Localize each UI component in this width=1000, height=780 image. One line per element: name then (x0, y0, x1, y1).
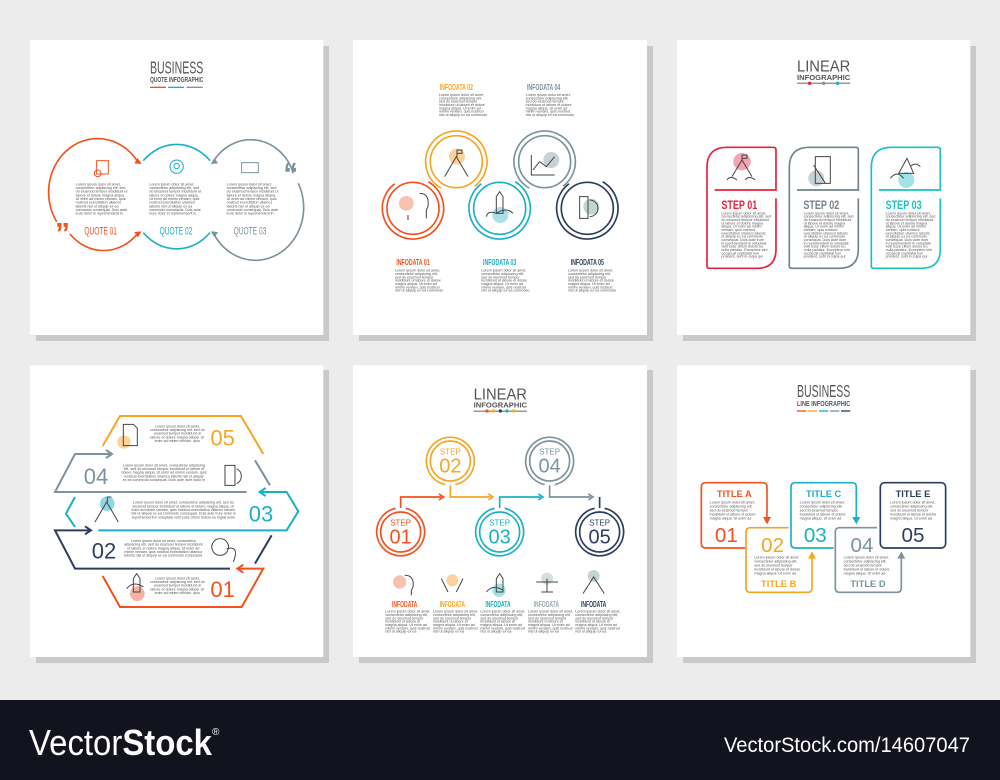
quote texts (76, 182, 278, 216)
step texts: velit esse cillum dolore eu (804, 245, 846, 249)
icons (94, 160, 258, 177)
quote marks: ” (55, 217, 70, 250)
infodata texts: Lorem ipsum dolor sit amet, (395, 269, 440, 273)
infodata texts: Lorem ipsum dolor sit amet, (575, 610, 620, 614)
circles (371, 120, 629, 250)
panel: linear steps 01-05 (353, 365, 647, 657)
title: QUOTE INFOGRAPHIC (150, 75, 204, 84)
step texts: velit esse cillum dolore eu (886, 245, 928, 249)
box texts: incididunt ut labore et dolore (800, 512, 846, 516)
step labels: STEP (589, 518, 610, 527)
step texts: ut labore et dolore magna (804, 221, 846, 225)
infodata texts: magna aliqua. Ut enim ad (395, 282, 437, 286)
step texts: ut labore et dolore magna (721, 221, 764, 225)
infodata texts: incididunt ut labore et dolore (526, 103, 572, 107)
band texts: ut labore et dolore magna aliqua. Ut enim ad (127, 546, 199, 550)
step texts: consectetur adipiscing elit, sed (804, 215, 853, 219)
box texts: incididunt ut labore et dolore (710, 512, 756, 516)
infodata texts: Lorem ipsum dolor sit amet, (385, 610, 430, 614)
box texts: incididunt ut labore et dolore (754, 568, 800, 572)
infodata texts: nisi ut aliquip ex ea commodo (568, 289, 616, 293)
box texts: incididunt ut labore et dolore (844, 568, 890, 572)
band texts: Lorem ipsum dolor sit amet, consectetur adipiscing elit, sed do (133, 501, 234, 505)
step texts: Lorem ipsum dolor sit amet, (721, 211, 766, 215)
step texts: consequat. Duis aute irure (804, 238, 846, 242)
box texts: Lorem ipsum dolor sit amet, (754, 556, 799, 560)
infodata texts: nisi ut aliquip ex ea (385, 630, 417, 634)
panel: linear infographic steps (677, 40, 970, 335)
infodata texts: sed do eiusmod tempor (568, 275, 607, 279)
icons (399, 149, 599, 223)
infodata labels: INFODATA (581, 600, 606, 609)
infodata texts: consectetur adipiscing elit, (385, 613, 428, 617)
title: BUSINESS (150, 57, 203, 77)
title (797, 59, 851, 85)
infodata texts: nisi ut aliquip ex ea commodo (439, 113, 487, 117)
quote labels: QUOTE 01 (84, 225, 117, 237)
box texts: consectetur adipiscing elit, (800, 504, 843, 508)
title (474, 386, 528, 413)
infodata texts: Lorem ipsum dolor sit amet, (439, 93, 484, 97)
step texts: ut aliquip ex ea commodo (804, 235, 845, 239)
infodata texts: Lorem ipsum dolor sit amet, (480, 610, 525, 614)
step texts: aliqua. Ut enim ad minim (804, 225, 844, 229)
infodata texts: consectetur adipiscing elit, (433, 613, 476, 617)
box texts: magna aliqua. Ut enim ad (800, 516, 841, 520)
infodata texts: minim veniam, quis nostrud (575, 626, 620, 630)
infodata texts: sed do eiusmod tempor (575, 616, 614, 620)
infodata texts: sed do eiusmod tempor (481, 275, 520, 279)
step texts: do eiusmod tempor incididunt (721, 218, 769, 222)
band texts: Lorem ipsum dolor sit amet, consectetur (131, 539, 196, 543)
infodata texts: consectetur adipiscing elit, (480, 613, 523, 617)
step texts: Lorem ipsum dolor sit amet, (804, 211, 849, 215)
quote texts: irure dolor in reprehenderit in (227, 212, 274, 216)
step texts: Lorem ipsum dolor sit amet, (886, 211, 931, 215)
arrowheads (85, 450, 266, 573)
panel: infodata circles (353, 40, 647, 335)
step texts: velit esse cillum dolore eu (721, 245, 763, 249)
infodata labels (392, 600, 606, 609)
band texts: dolore magna aliqua. Ut enim ad minim veniam, quis (121, 471, 207, 475)
infodata texts: Lorem ipsum dolor sit amet, (526, 93, 571, 97)
band texts: eiusmod tempor incididunt ut (154, 432, 201, 436)
infodata labels: INFODATA (534, 600, 559, 609)
infodata texts: sed do eiusmod tempor (439, 100, 478, 104)
band texts: eiusmod tempor incididunt ut (154, 584, 201, 588)
band texts: minim veniam, quis nostrud exercitation ullamco (124, 550, 202, 554)
box texts: Lorem ipsum dolor sit amet, (800, 500, 845, 504)
titles and numbers: TITLE C (806, 489, 842, 499)
step labels: 02 (439, 456, 461, 478)
titles and numbers: TITLE B (761, 579, 797, 589)
quote texts: labore et dolore magna aliqua. (149, 193, 199, 197)
numbers: 04 (84, 464, 108, 489)
step labels: STEP 03 (886, 198, 922, 212)
step texts: nulla pariatur. Excepteur sint (721, 248, 767, 252)
step texts: proident, sunt in culpa qui (886, 255, 928, 259)
step texts: proident, sunt in culpa qui (804, 255, 846, 259)
band texts: enim ad minim veniam, quis nostrud exercitation ullamco laboris (131, 508, 235, 512)
arrowheads (763, 517, 905, 559)
band texts: labore et dolore magna aliqua. Ut (150, 587, 204, 591)
box texts: consectetur adipiscing elit, (890, 504, 933, 508)
band texts (121, 424, 236, 595)
infodata labels: INFODATA 03 (483, 257, 516, 267)
infodata texts: minim veniam, quis nostrud (480, 626, 525, 630)
step texts: nulla pariatur. Excepteur sint (804, 248, 850, 252)
quote texts: labore et dolore magna aliqua. (227, 193, 276, 197)
infodata labels: INFODATA (485, 600, 511, 609)
band texts: Lorem ipsum dolor sit amet, (155, 424, 200, 428)
step texts: ut labore et dolore magna (886, 221, 928, 225)
icons (393, 570, 604, 597)
title: LINEAR (474, 386, 527, 403)
infodata texts: nisi ut aliquip ex ea commodo (481, 289, 529, 293)
infodata labels: INFODATA 04 (527, 82, 560, 92)
quote texts: irure dolor in reprehenderit in (76, 212, 123, 216)
quote texts: consectetur adipiscing elit, sed (76, 186, 125, 190)
quote marks (55, 157, 298, 250)
quote marks: “ (283, 157, 298, 190)
title (797, 381, 851, 412)
step labels: STEP 01 (721, 198, 758, 212)
step texts: ut aliquip ex ea commodo (886, 235, 927, 239)
quote texts: Lorem ipsum dolor sit amet, (149, 182, 194, 186)
numbers: 03 (249, 501, 273, 526)
step texts: occaecat cupidatat non (721, 251, 759, 255)
step labels (390, 447, 611, 549)
quote texts: nostrud exercitation ullamco (76, 201, 121, 205)
band texts: enim ad minim veniam, quis (155, 591, 200, 595)
infodata texts: magna aliqua. Ut enim ad (568, 282, 610, 286)
step texts: ut aliquip ex ea commodo (721, 235, 763, 239)
band texts: labore et dolore magna aliqua. Ut (150, 435, 204, 439)
titles and numbers: 01 (715, 524, 738, 547)
box texts: magna aliqua. Ut enim ad (710, 516, 751, 520)
infodata texts: minim veniam, quis nostrud (385, 626, 430, 630)
step texts: in reprehenderit in voluptate (804, 241, 849, 245)
band texts: elit, sed do eiusmod tempor incididunt ut labore et (124, 467, 204, 471)
infodata texts: sed do eiusmod tempor (480, 616, 519, 620)
step texts: in reprehenderit in voluptate (886, 241, 931, 245)
titles and numbers (715, 489, 930, 589)
quote labels: QUOTE 03 (234, 225, 266, 237)
band texts: laboris nisi ut aliquip ex ea commodo consequat. (124, 554, 203, 558)
quote labels: QUOTE 02 (160, 225, 192, 237)
step labels: 05 (589, 527, 611, 549)
quote texts: Lorem ipsum dolor sit amet, (227, 182, 272, 186)
step labels: STEP (440, 447, 461, 456)
titles and numbers: 04 (850, 534, 873, 557)
footer url: VectorStock.com/14607047 (724, 734, 970, 757)
quote texts: Ut enim ad minim veniam, quis (149, 197, 199, 201)
numbers: 02 (92, 539, 116, 564)
box texts: incididunt ut labore et dolore (890, 512, 936, 516)
box texts: Lorem ipsum dolor sit amet, (710, 500, 755, 504)
quote texts: commodo consequat. Duis aute (227, 208, 278, 212)
step labels: STEP (539, 447, 560, 456)
step labels: 04 (539, 456, 561, 478)
step texts: occaecat cupidatat non (886, 251, 923, 255)
infodata texts: Lorem ipsum dolor sit amet, (433, 610, 478, 614)
box texts: Lorem ipsum dolor sit amet, (890, 500, 935, 504)
band texts: eiusmod tempor incididunt ut labore et dolore magna aliqua. Ut (132, 504, 234, 508)
band texts: enim ad minim veniam, quis (155, 439, 200, 443)
band texts: Lorem ipsum dolor sit amet, consectetur adipiscing (123, 463, 205, 467)
step labels: 03 (489, 527, 511, 549)
bands (55, 416, 298, 607)
infodata labels: INFODATA 02 (440, 82, 473, 92)
step texts: do eiusmod tempor incididunt (886, 218, 933, 222)
infodata texts: incididunt ut labore et (433, 620, 468, 624)
titles and numbers: 02 (761, 534, 784, 557)
quote texts: Ut enim ad minim veniam, quis (76, 197, 126, 201)
quote texts: nostrud exercitation ullamco (227, 201, 272, 205)
box texts: magna aliqua. Ut enim ad (754, 572, 796, 576)
quote texts: consectetur adipiscing elit, sed (149, 186, 199, 190)
step texts: exercitation ullamco laboris (804, 231, 848, 235)
quote circles (49, 139, 304, 260)
step cards (707, 147, 940, 268)
box texts: consectetur adipiscing elit, (710, 504, 753, 508)
infodata texts: consectetur adipiscing elit, (439, 96, 482, 100)
band texts: nostrud exercitation ullamco laboris nisi ut aliquip (124, 474, 204, 478)
infodata texts: minim veniam, quis nostrud (395, 285, 440, 289)
quote texts: do eiusmod tempor incididunt ut (76, 190, 127, 194)
infodata labels: INFODATA 01 (396, 257, 430, 267)
band texts: consectetur adipiscing elit, sed do (150, 428, 205, 432)
infodata texts: nisi ut aliquip ex ea commodo (395, 289, 443, 293)
box texts: consectetur adipiscing elit, (844, 560, 887, 564)
infodata texts (385, 610, 620, 634)
footer bar (0, 700, 1000, 780)
box texts: sed do eiusmod tempor (710, 508, 749, 512)
step circles and connectors (377, 437, 624, 556)
infodata texts: magna aliqua. Ut enim ad (433, 623, 475, 627)
step texts: exercitation ullamco laboris (721, 231, 766, 235)
band texts: consectetur adipiscing elit, sed do (150, 580, 205, 584)
infodata texts: sed do eiusmod tempor (433, 616, 472, 620)
step texts: veniam, quis nostrud (886, 228, 919, 232)
step texts: proident, sunt in culpa qui (721, 255, 763, 259)
title: INFOGRAPHIC (474, 401, 528, 410)
step texts: in reprehenderit in voluptate (721, 241, 767, 245)
step texts: aliqua. Ut enim ad minim (886, 225, 926, 229)
panel: hexagon arrows (30, 365, 323, 657)
step texts: occaecat cupidatat non (804, 251, 841, 255)
title: LINE INFOGRAPHIC (797, 399, 851, 408)
band texts: nisi ut aliquip ex ea commodo consequat. Duis aute irure dolor in (131, 512, 236, 516)
box texts (710, 500, 936, 576)
title: BUSINESS (797, 381, 850, 401)
infodata texts: incididunt ut labore et (528, 620, 563, 624)
quote texts: do eiusmod tempor incididunt ut (149, 190, 201, 194)
quote texts: Ut enim ad minim veniam, quis (227, 197, 277, 201)
infodata texts: consectetur adipiscing elit, (528, 613, 571, 617)
icons (95, 424, 241, 601)
infodata texts: Lorem ipsum dolor sit amet, (528, 610, 573, 614)
card shadows (36, 46, 976, 663)
infodata texts: Lorem ipsum dolor sit amet, (568, 269, 613, 273)
titles and numbers: 05 (901, 524, 924, 547)
title: LINEAR (797, 59, 850, 76)
step texts (721, 211, 935, 259)
arrows (134, 158, 218, 237)
infodata texts: nisi ut aliquip ex ea (480, 630, 512, 634)
infodata texts: magna aliqua. Ut enim ad (439, 106, 481, 110)
quote texts: consectetur adipiscing elit, sed (227, 186, 276, 190)
infodata texts (395, 93, 616, 293)
icons (727, 153, 920, 188)
panel: business quote infographic (30, 40, 323, 335)
step texts: veniam, quis nostrud (804, 228, 837, 232)
numbers: 01 (210, 577, 235, 602)
step texts: veniam, quis nostrud (721, 228, 755, 232)
titles and numbers: TITLE A (717, 489, 752, 499)
box texts: magna aliqua. Ut enim ad (844, 572, 885, 576)
box texts: magna aliqua. Ut enim ad (890, 516, 932, 520)
infodata texts: minim veniam, quis nostrud (568, 285, 612, 289)
panel: business line infographic (677, 365, 970, 657)
step texts: consequat. Duis aute irure (886, 238, 928, 242)
box texts: sed do eiusmod tempor (844, 564, 883, 568)
box texts: sed do eiusmod tempor (890, 508, 929, 512)
footer logo: VectorStock (29, 722, 213, 763)
infodata texts: minim veniam, quis nostrud (528, 626, 572, 630)
band texts: Lorem ipsum dolor sit amet, (155, 576, 200, 580)
infodata labels: INFODATA 05 (571, 257, 604, 267)
step labels: STEP 02 (803, 198, 840, 212)
title (150, 57, 204, 88)
infodata texts: nisi ut aliquip ex ea commodo (526, 113, 574, 117)
quote texts: laboris nisi ut aliquip ex ea (227, 204, 270, 208)
infodata texts: magna aliqua. Ut enim ad (385, 623, 427, 627)
infodata texts: magna aliqua. Ut enim ad (528, 623, 570, 627)
infodata texts: incididunt ut labore et dolore (481, 279, 527, 283)
infodata texts: minim veniam, quis nostrud (439, 110, 484, 114)
infodata texts: incididunt ut labore et dolore (439, 103, 485, 107)
numbers (84, 425, 273, 602)
step labels: STEP (489, 518, 510, 527)
infodata labels (396, 82, 604, 267)
box texts: consectetur adipiscing elit, (754, 560, 797, 564)
box texts: Lorem ipsum dolor sit amet, (844, 556, 889, 560)
titles and numbers: 03 (804, 524, 827, 547)
infodata texts: minim veniam, quis nostrud (433, 626, 478, 630)
boxes (701, 483, 946, 592)
infodata texts: Lorem ipsum dolor sit amet, (481, 269, 526, 273)
infodata texts: magna aliqua. Ut enim ad (526, 106, 567, 110)
step texts: do eiusmod tempor incididunt (804, 218, 851, 222)
step texts: consectetur adipiscing elit, sed (886, 215, 935, 219)
quote texts: commodo consequat. Duis aute (76, 208, 127, 212)
infodata texts: nisi ut aliquip ex ea (528, 630, 560, 634)
quote texts: labore et dolore magna aliqua. (76, 193, 125, 197)
infodata texts: incididunt ut labore et (575, 620, 610, 624)
band texts: ex ea commodo consequat. Duis aute irure dolor in (123, 478, 205, 482)
infodata texts: consectetur adipiscing elit, (395, 272, 438, 276)
step texts: aliqua. Ut enim ad minim (721, 225, 762, 229)
quote texts: Lorem ipsum dolor sit amet, (76, 182, 121, 186)
quote texts: commodo consequat. Duis aute (149, 208, 201, 212)
quote labels (84, 225, 266, 237)
infodata texts: sed do eiusmod tempor (528, 616, 567, 620)
title: INFOGRAPHIC (797, 73, 851, 82)
step labels (721, 198, 922, 212)
step texts: consectetur adipiscing elit, sed (721, 215, 771, 219)
box texts: sed do eiusmod tempor (800, 508, 839, 512)
infodata texts: magna aliqua. Ut enim ad (481, 282, 523, 286)
infodata texts: incididunt ut labore et (480, 620, 515, 624)
infodata texts: sed do eiusmod tempor (395, 275, 434, 279)
quote texts: irure dolor in reprehenderit in (149, 212, 196, 216)
step texts: exercitation ullamco laboris (886, 231, 930, 235)
band texts: adipiscing elit, sed do eiusmod tempor incididunt (124, 543, 203, 547)
registered mark: ® (212, 727, 220, 738)
step texts: nulla pariatur. Excepteur sint (886, 248, 932, 252)
infodata labels: INFODATA (392, 600, 417, 609)
step labels: 01 (390, 527, 412, 549)
infodata texts: incididunt ut labore et (385, 620, 420, 624)
infodata texts: nisi ut aliquip ex ea (575, 630, 607, 634)
titles and numbers: TITLE E (896, 489, 930, 499)
infodata texts: consectetur adipiscing elit, (568, 272, 611, 276)
quote texts: laboris nisi ut aliquip ex ea (149, 204, 193, 208)
infodata texts: minim veniam, quis nostrud (481, 285, 526, 289)
band texts: reprehenderit in voluptate velit esse cillum dolore eu fugiat nulla (132, 515, 236, 519)
numbers: 05 (210, 425, 235, 450)
quote texts: do eiusmod tempor incididunt ut (227, 190, 278, 194)
box texts: sed do eiusmod tempor (754, 564, 793, 568)
infodata texts: sed do eiusmod tempor (385, 616, 424, 620)
infodata texts: minim veniam, quis nostrud (526, 110, 570, 114)
step texts: consequat. Duis aute irure (721, 238, 764, 242)
infodata texts: incididunt ut labore et dolore (395, 279, 441, 283)
titles and numbers: TITLE D (850, 579, 886, 589)
infodata texts: nisi ut aliquip ex ea (433, 630, 465, 634)
infodata texts: magna aliqua. Ut enim ad (480, 623, 522, 627)
infodata labels: INFODATA (440, 600, 465, 609)
infodata texts: sed do eiusmod tempor (526, 100, 565, 104)
infodata texts: magna aliqua. Ut enim ad (575, 623, 617, 627)
quote texts: nostrud exercitation ullamco (149, 201, 195, 205)
step labels: STEP (390, 518, 411, 527)
quote texts: laboris nisi ut aliquip ex ea (76, 204, 120, 208)
infodata texts: incididunt ut labore et dolore (568, 279, 614, 283)
infodata texts: consectetur adipiscing elit, (526, 96, 569, 100)
infodata texts: consectetur adipiscing elit, (575, 613, 618, 617)
infodata texts: consectetur adipiscing elit, (481, 272, 524, 276)
